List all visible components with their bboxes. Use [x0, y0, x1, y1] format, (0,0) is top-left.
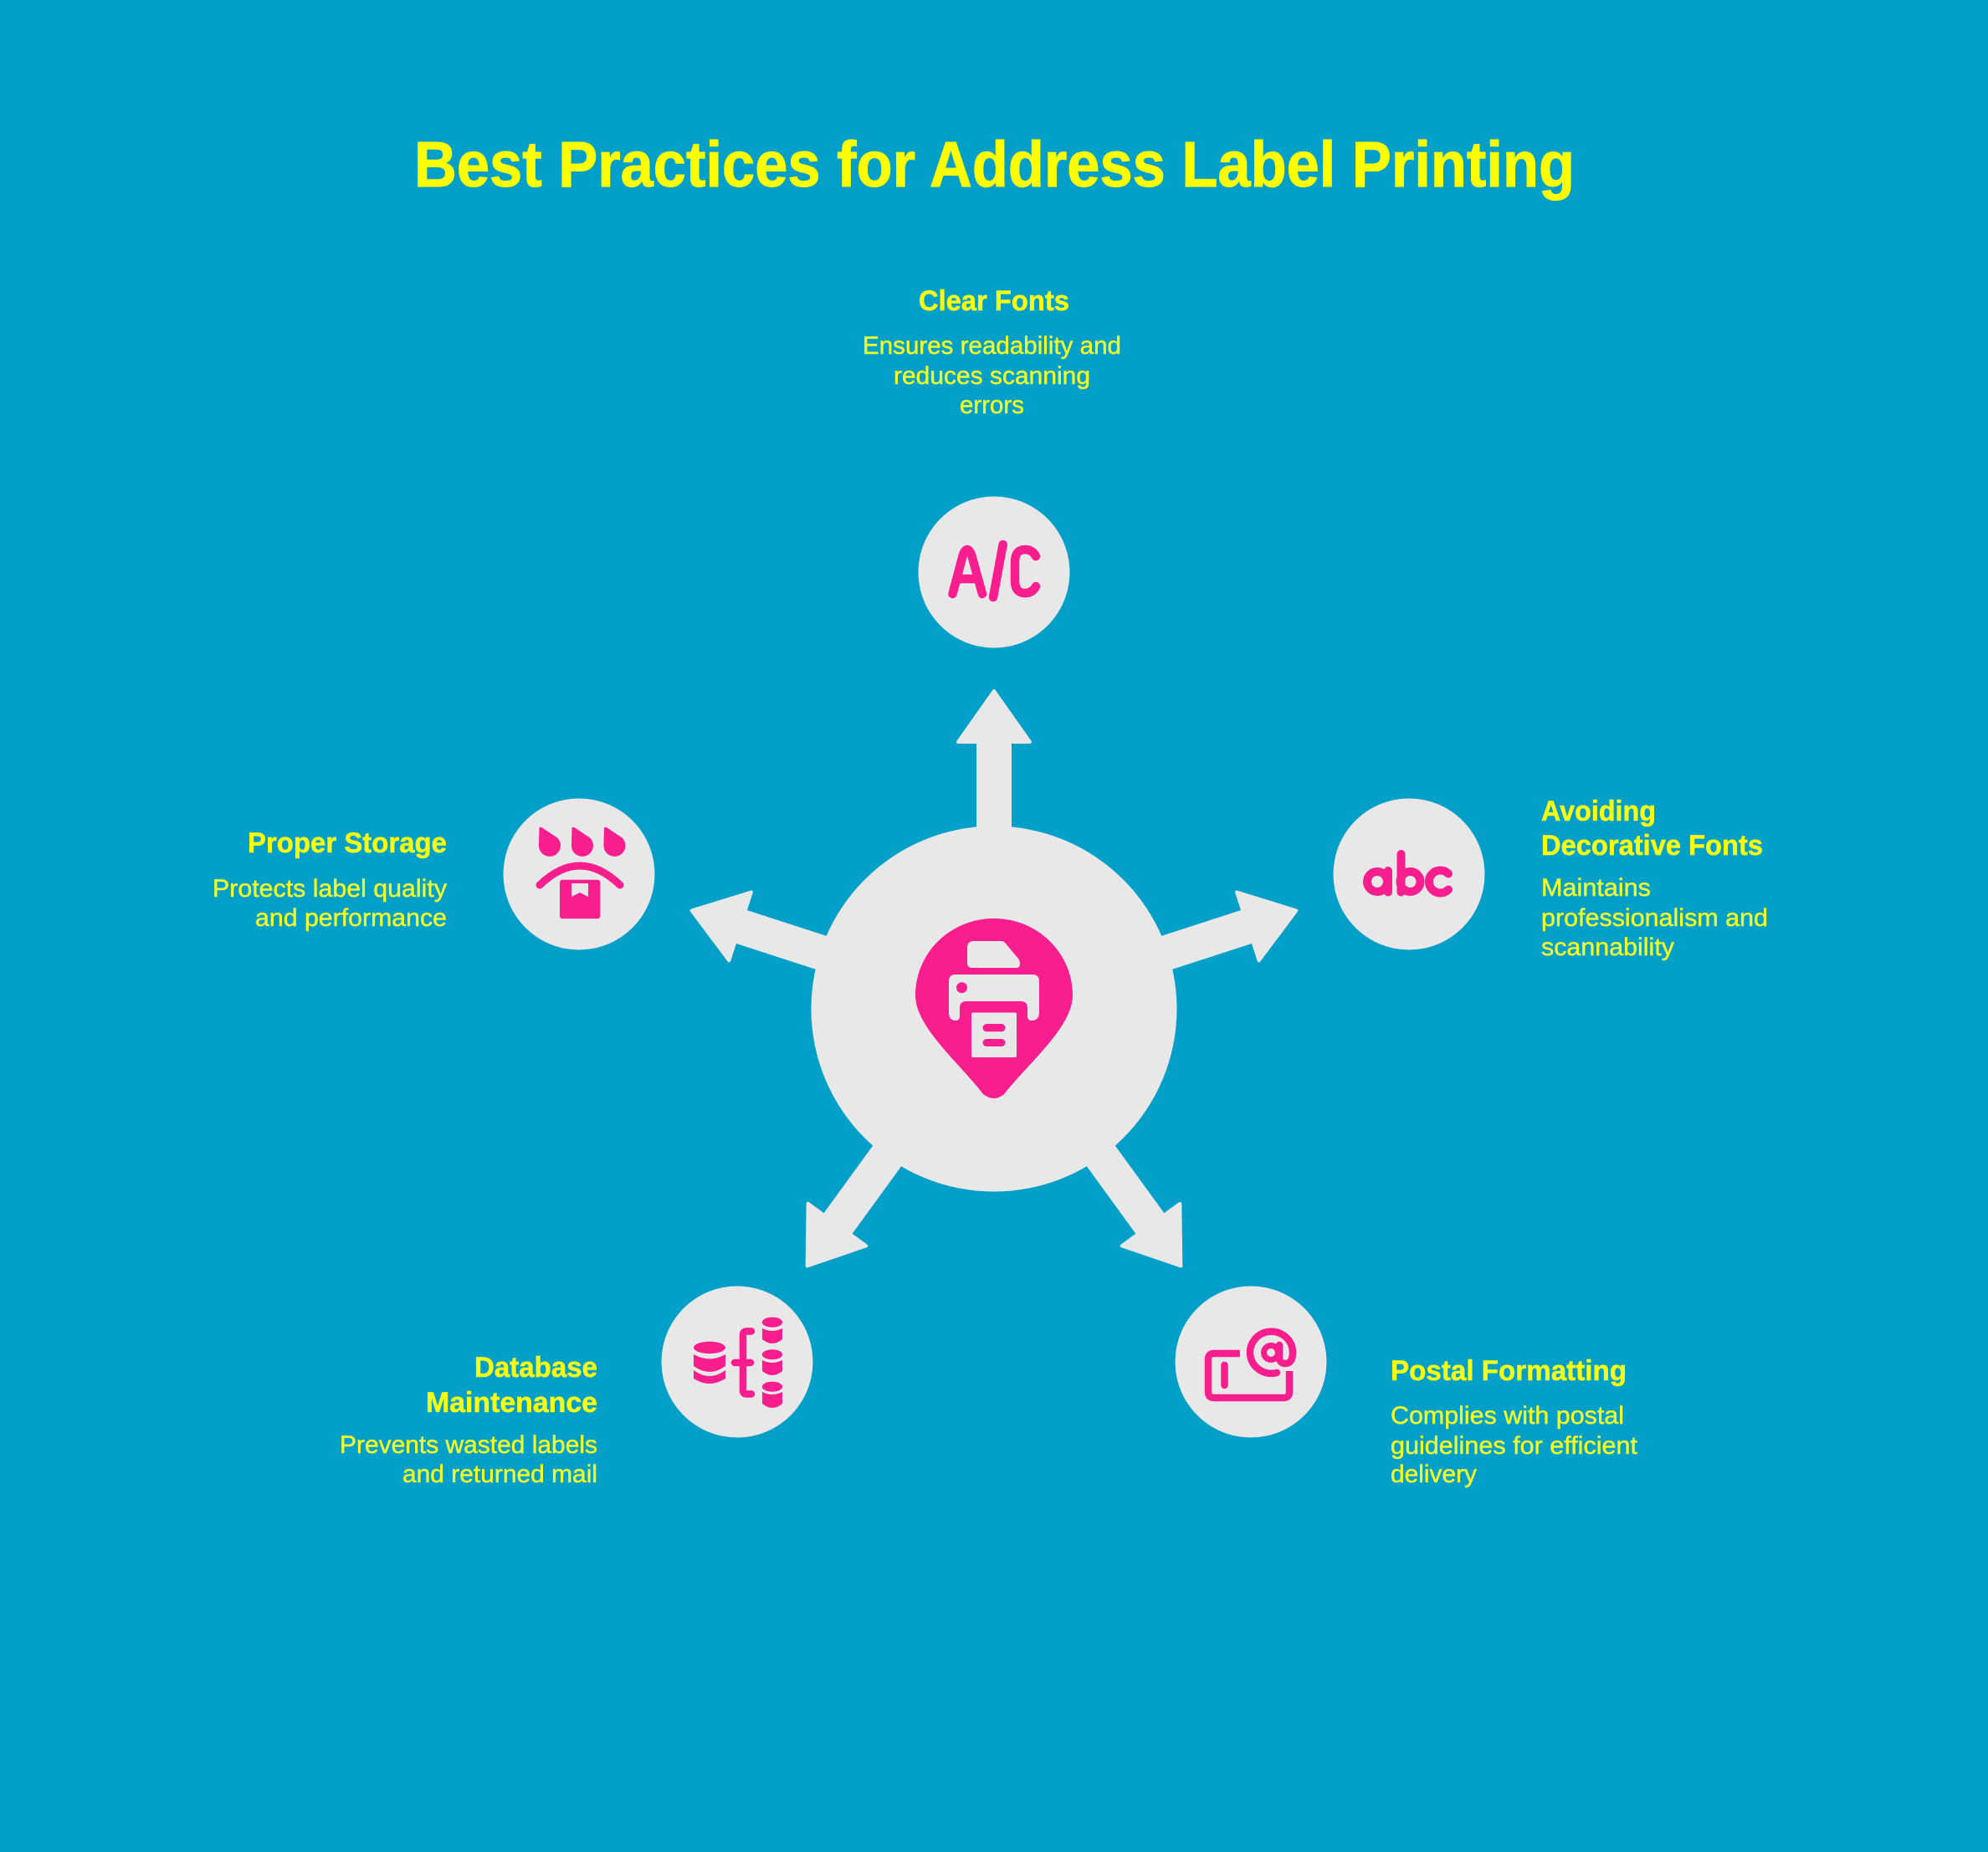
label: Clear Fonts: errors: [960, 391, 1024, 419]
label: Avoiding Decorative Fonts: [1541, 796, 1768, 961]
title: Best Practices for Address Label Printing: [414, 129, 1575, 201]
label: Avoiding Decorative Fonts: scannability: [1541, 934, 1674, 961]
label: Database Maintenance: and returned mail: [402, 1461, 597, 1488]
icon: envelope with at sign: [1208, 1332, 1293, 1398]
label: Clear Fonts: Ensures readability and: [863, 332, 1121, 360]
icon: printer location pin: [915, 918, 1073, 1098]
label: Database Maintenance: Maintenance: [426, 1387, 597, 1419]
node: Postal Formatting circle and icon: [1175, 1287, 1327, 1437]
label: Postal Formatting: Complies with postal: [1391, 1402, 1624, 1430]
label: Avoiding Decorative Fonts: Avoiding: [1541, 796, 1656, 827]
label: Avoiding Decorative Fonts: Decorative Fonts: [1541, 830, 1763, 862]
label: Clear Fonts: Clear Fonts: [919, 285, 1069, 317]
node: Clear Fonts circle and icon: [919, 497, 1069, 647]
label: Clear Fonts: [863, 285, 1121, 419]
label: Postal Formatting: guidelines for efficient: [1391, 1432, 1638, 1460]
icon: A/C letters: [952, 545, 1036, 597]
icon: abc letters: [1367, 854, 1448, 893]
label: Proper Storage: [213, 827, 447, 932]
arrow: up to Clear Fonts: [958, 691, 1030, 842]
label: Postal Formatting: Postal Formatting: [1391, 1355, 1627, 1387]
label: Avoiding Decorative Fonts: professionalism and: [1541, 904, 1768, 932]
node: Avoiding Decorative Fonts circle and icon: [1334, 798, 1484, 950]
label: Database Maintenance: Prevents wasted labels: [340, 1431, 597, 1459]
node: Proper Storage circle and icon: [504, 798, 654, 950]
central circle: [812, 826, 1176, 1191]
label: Postal Formatting: delivery: [1391, 1461, 1477, 1488]
node: Database Maintenance circle and icon: [661, 1287, 813, 1437]
label: Avoiding Decorative Fonts: Maintains: [1541, 874, 1651, 902]
arrow: to Avoiding Decorative Fonts: [1142, 877, 1308, 991]
arrow: to Postal Formatting: [1063, 1123, 1210, 1287]
icon: database tree: [694, 1317, 782, 1408]
arrow: to Proper Storage: [680, 877, 846, 991]
label: Proper Storage: Proper Storage: [248, 827, 447, 859]
icon: water drops over package: [539, 827, 625, 918]
label: Proper Storage: and performance: [255, 904, 447, 932]
hub with five arrows: [680, 691, 1308, 1287]
label: Proper Storage: Protects label quality: [213, 875, 447, 903]
label: Database Maintenance: [340, 1352, 597, 1488]
arrow: to Database Maintenance: [778, 1123, 925, 1287]
label: Postal Formatting: [1391, 1355, 1638, 1488]
label: Database Maintenance: Database: [474, 1352, 597, 1384]
label: Clear Fonts: reduces scanning: [894, 362, 1090, 390]
